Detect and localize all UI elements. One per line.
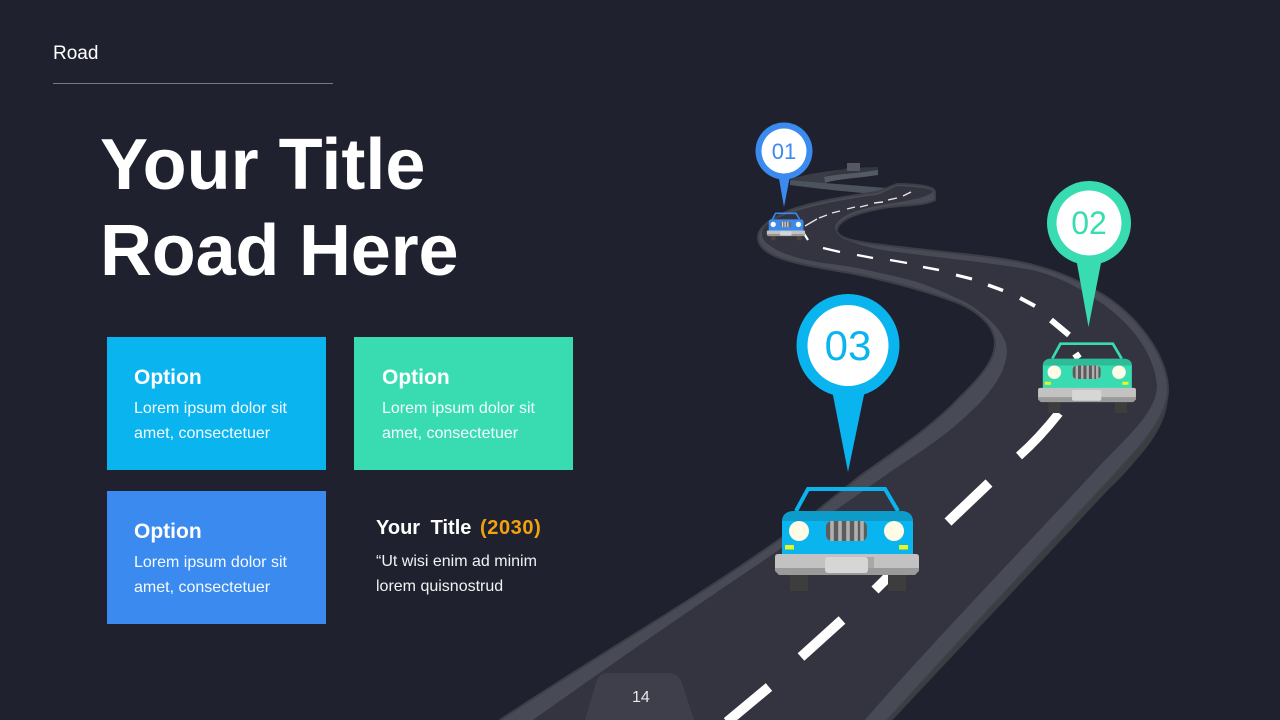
quote text: “Ut wisi enim ad minim: [376, 553, 537, 570]
car 02 green: [1038, 344, 1136, 413]
main title: [100, 125, 458, 291]
pin 03: [796, 294, 900, 472]
option box: blue: Lorem ipsum dolor sit: [134, 554, 287, 571]
road outer shadow: [860, 380, 1168, 720]
option box: cyan: [107, 337, 326, 470]
option box: cyan: Option: [134, 366, 202, 389]
option box: blue: [107, 491, 326, 624]
option box: blue: amet, consectetuer: [134, 579, 270, 596]
pin 03: 03: [825, 322, 871, 369]
car 01 blue: [767, 213, 805, 240]
option box: green: Lorem ipsum dolor sit: [382, 400, 535, 417]
road: [494, 163, 1168, 720]
quote text: lorem quisnostrud: [376, 578, 503, 595]
section label: Road: [53, 43, 98, 64]
option box: cyan: amet, consectetuer: [134, 425, 270, 442]
header rule: [53, 83, 333, 84]
road surface: [530, 186, 1157, 720]
page number tab: [585, 673, 694, 720]
pin 01: [756, 122, 812, 207]
option box: blue: Option: [134, 520, 202, 543]
option box: green: [354, 337, 573, 470]
option box: green: Option: [382, 366, 450, 389]
main title: Road Here: [100, 211, 458, 291]
far strand of road: [790, 180, 887, 195]
option box: cyan: Lorem ipsum dolor sit: [134, 400, 287, 417]
option box: green: amet, consectetuer: [382, 425, 518, 442]
main title: Your Title: [100, 125, 425, 205]
quote text: [376, 553, 537, 595]
road side band: [494, 184, 1168, 720]
page number: 14: [632, 689, 650, 706]
pin 01: 01: [772, 139, 796, 164]
pin 02: [1047, 181, 1131, 327]
hairpin and top strand of road: [790, 163, 878, 183]
pin 02: 02: [1071, 205, 1107, 241]
lane markings: [727, 192, 1080, 720]
car 03 cyan: [775, 489, 919, 591]
subheading with year: Your Title (2030): [376, 517, 541, 539]
